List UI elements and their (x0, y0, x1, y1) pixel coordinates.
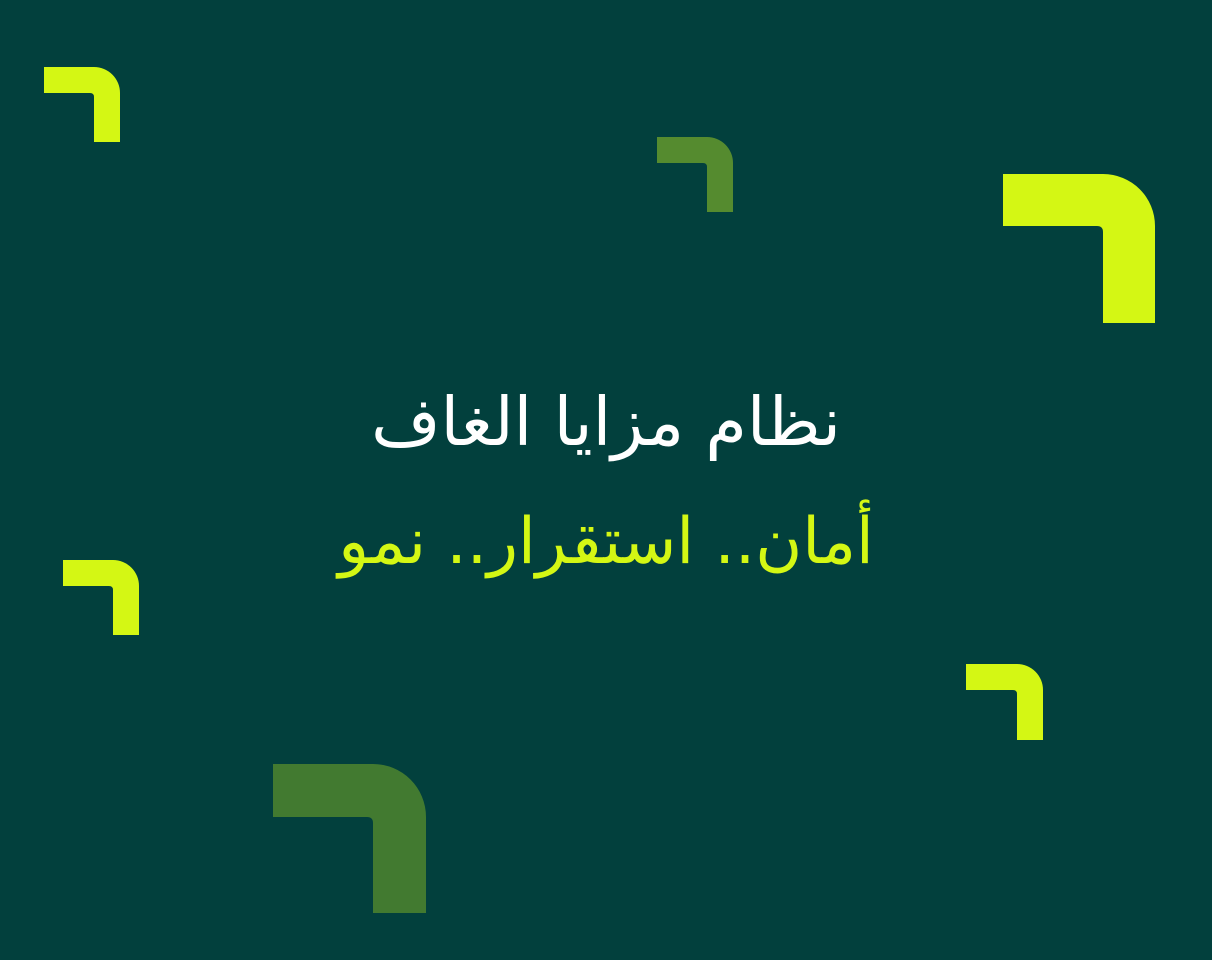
subtitle: أمان.. استقرار.. نمو (338, 505, 874, 579)
bracket: mid-right lime (966, 664, 1043, 740)
bracket: bottom large green (273, 764, 426, 913)
bracket: top-left lime (44, 67, 120, 142)
bracket: top-right large lime (1003, 174, 1155, 323)
bracket: top-center green (657, 137, 733, 212)
bracket: mid-left lime (63, 560, 139, 635)
title: نظام مزايا الغاف (371, 383, 841, 461)
